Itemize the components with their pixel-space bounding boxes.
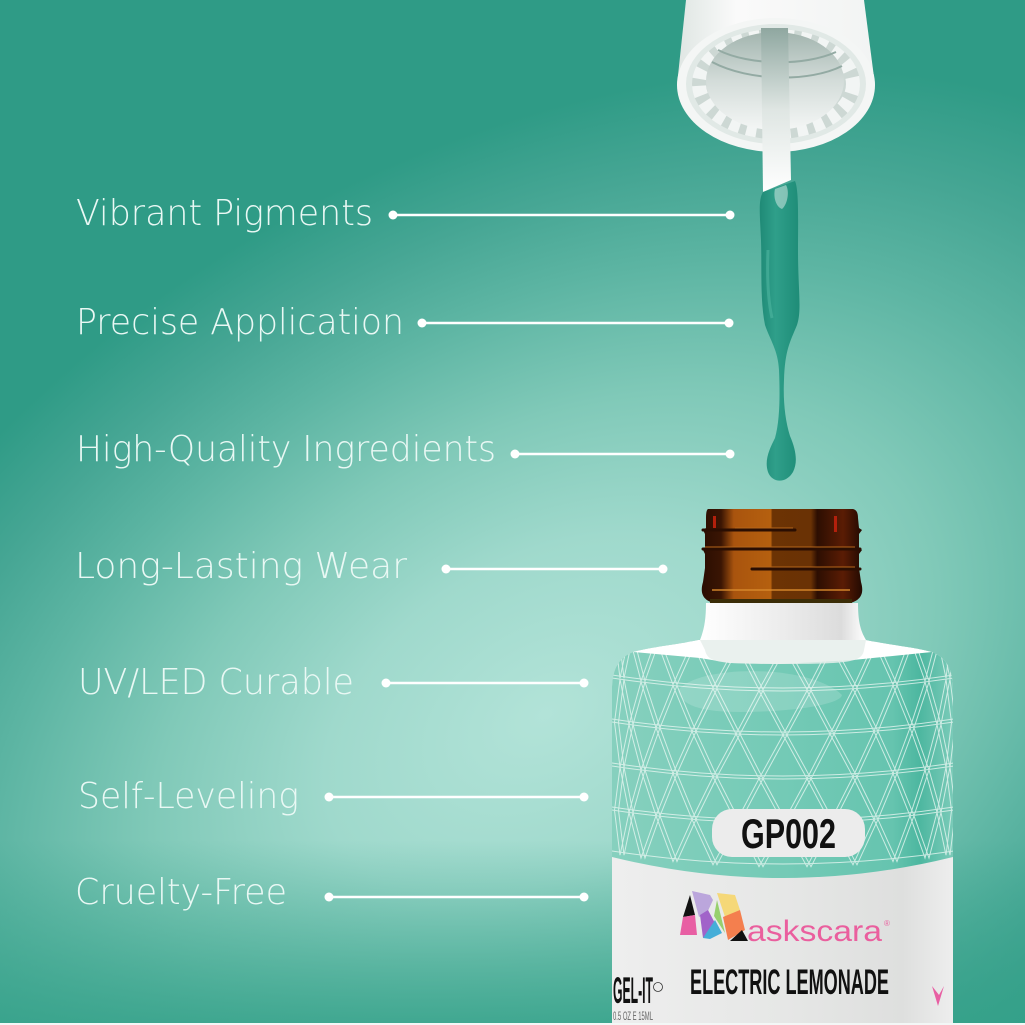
- text: GEL-IT: [613, 970, 653, 1011]
- shoulder highlights: [633, 640, 932, 664]
- bottle body: [612, 603, 956, 1025]
- pink V badge: [932, 986, 944, 1006]
- feature label: Vibrant Pigments: Vibrant Pigments: [76, 193, 373, 234]
- bottom edge: [0, 1023, 1025, 1025]
- polish drip with droplet: [760, 181, 800, 481]
- logo mark: [680, 891, 748, 941]
- brush cap seen from below: [677, 0, 875, 152]
- feature label: Vibrant Pigments: [76, 193, 734, 234]
- feature label: UV/LED Curable: [78, 662, 588, 703]
- white neck collar: [700, 603, 866, 640]
- feature label: Self-Leveling: Self-Leveling: [78, 776, 299, 817]
- feature label: Precise Application: [76, 302, 734, 343]
- feature label: Precise Application: Precise Application: [76, 302, 404, 343]
- feature label: Cruelty-Free: Cruelty-Free: [75, 872, 287, 913]
- shoulder and teal label: [612, 633, 956, 1025]
- Maskscara logo: askscara: [747, 915, 882, 948]
- product code pill: GP002: [741, 810, 836, 857]
- feature label: UV/LED Curable: UV/LED Curable: [78, 662, 354, 703]
- feature label: Cruelty-Free: [75, 872, 588, 913]
- feature label: Long-Lasting Wear: Long-Lasting Wear: [75, 546, 407, 587]
- Maskscara logo: ®: [884, 919, 890, 928]
- GEL-IT mark: 0.5 OZ E 15ML: [613, 1009, 653, 1023]
- amber bottle neck with threads: [702, 509, 862, 603]
- GEL-IT mark: [613, 970, 662, 1023]
- feature label: Long-Lasting Wear: [75, 546, 668, 587]
- feature label: High-Quality Ingredients: [76, 429, 734, 470]
- feature label: High-Quality Ingredients: High-Quality Ingredients: [76, 429, 496, 470]
- Maskscara logo: [680, 891, 890, 948]
- applicator stem: [761, 28, 791, 192]
- feature label: Self-Leveling: [78, 776, 588, 817]
- triangle pattern: [612, 633, 956, 867]
